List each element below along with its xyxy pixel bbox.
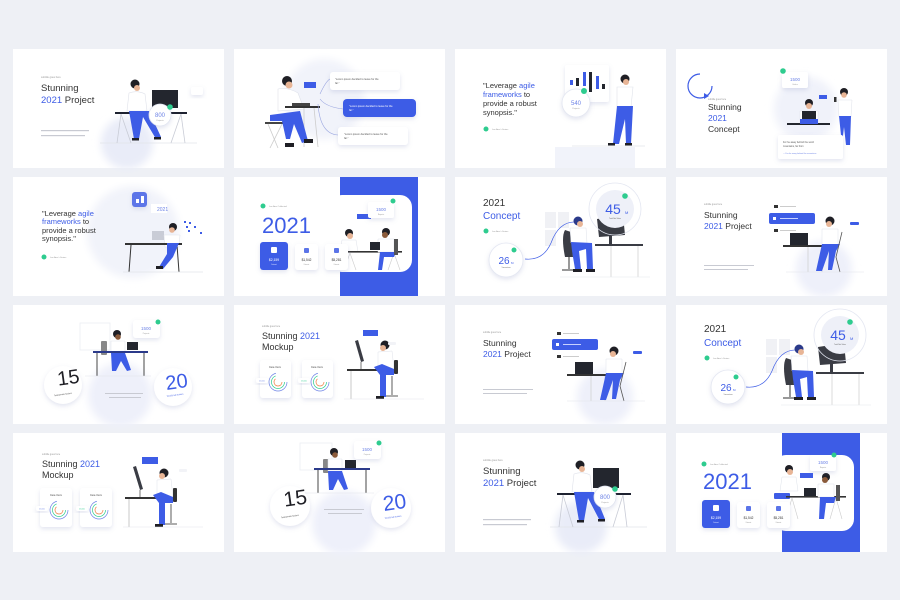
text block (483, 389, 533, 394)
quote text: "Leverage agile (42, 209, 94, 218)
title (483, 198, 520, 234)
play icon (688, 74, 712, 99)
illustration: woman at desk (85, 330, 151, 376)
illustration: standing woman (572, 74, 645, 146)
title: 2021 Project (483, 478, 537, 489)
title: 2021 (483, 198, 506, 209)
curve (525, 222, 576, 259)
card: 1500: 1500 (376, 207, 387, 212)
author (484, 126, 509, 132)
stat card 2: $1,542 (744, 516, 754, 520)
slide 16: 2021 stats with blue panel (676, 433, 887, 552)
title: Stunning (41, 83, 79, 94)
circle stat: 20 (371, 488, 411, 528)
badge: 800 (594, 486, 618, 508)
author: Lee Ann's Series (492, 128, 509, 131)
heading: 2021: Lee Ann Collected (269, 205, 288, 208)
title: 2021 Project (483, 349, 531, 359)
chart card 1: Data charts (269, 366, 282, 369)
slide 11: Stunning 2021 Project with chat (455, 305, 666, 425)
circle stat: 26M: M (733, 388, 736, 392)
quote text: synopsis." (42, 234, 76, 243)
title: Concept (483, 211, 520, 222)
quote text: frameworks to (483, 90, 530, 99)
circle stat: 45M: 45 (830, 327, 846, 343)
quote text: synopsis." (483, 108, 517, 117)
illustration card (774, 455, 854, 531)
card: 1500: Projects (364, 453, 370, 456)
slide 9: 15 and 20 stats (13, 305, 224, 427)
window (80, 323, 110, 350)
circle stat: 45M: Total Net Sales (609, 217, 621, 220)
title: Mockup (42, 470, 74, 480)
title: subtitle goes here (708, 98, 727, 101)
illustration card (330, 195, 412, 272)
circle stat: 45M: 45 (605, 201, 621, 217)
slide 3: quote with bar chart (455, 49, 666, 168)
title: subtitle goes here (262, 325, 281, 328)
circle stat: 20 (154, 368, 192, 406)
chart card 1: 45,000 (259, 380, 265, 382)
text block (41, 130, 89, 136)
illustration: person at desk (123, 223, 203, 272)
title: subtitle goes here (483, 459, 503, 462)
stat card 2: $1,542 (302, 258, 312, 262)
title (708, 98, 742, 134)
chart card 1 (256, 360, 291, 398)
title: subtitle goes here (704, 203, 723, 206)
connector lines (318, 79, 343, 135)
stat card 2 (737, 502, 760, 528)
icon: chart square (132, 192, 147, 207)
slide 7: 2021 Concept (455, 177, 666, 296)
circle stat: 15: 15 (282, 486, 308, 512)
title: Stunning (708, 102, 742, 112)
badge: 800: Projects (156, 119, 164, 122)
quote card 3: far." (344, 136, 349, 140)
text block (483, 519, 531, 525)
chart card 1 (36, 488, 72, 527)
slide 2: man with quote bubbles (234, 49, 445, 168)
title: Concept (708, 124, 740, 134)
window grid (545, 212, 569, 246)
chart card 2: 45,000 (301, 380, 307, 382)
circle stat: 15 (44, 366, 82, 404)
circle stat: 26M: 26 (498, 256, 510, 267)
stat card 2 (295, 244, 318, 270)
quote card 2 (blue): "Lorem ipsum decided to leave for the (349, 104, 393, 108)
chart card 2 (76, 488, 112, 527)
slide 6: 2021 stats with blue panel (234, 177, 445, 296)
title: Lee Ann's Series (713, 357, 730, 360)
title: Concept (704, 338, 741, 349)
title: subtitle goes here (42, 453, 61, 456)
title: 2021 Project (704, 221, 752, 231)
slide 15: Stunning 2021 Project (455, 433, 666, 553)
stat card 2: Dataset (304, 263, 310, 266)
circle stat: 26M: Transactions (723, 393, 733, 396)
title: 2021 (704, 324, 727, 335)
badge: 800 (149, 104, 173, 126)
title (483, 459, 537, 489)
chart card 2: Data charts (90, 494, 103, 497)
chat list (552, 332, 598, 358)
title: Stunning 2021 (262, 331, 320, 341)
chat list (769, 205, 815, 232)
label: 2021: 2021 (157, 207, 168, 213)
stat card 1 (blue): Dataset (271, 263, 277, 266)
badge: 800: 800 (155, 113, 166, 119)
title (41, 76, 95, 106)
bar chart card (565, 65, 609, 102)
author (42, 254, 67, 260)
quote text: provide a robust (42, 226, 97, 235)
chart card 1: Data charts (50, 494, 63, 497)
text block (704, 265, 754, 270)
quote card 2 (blue): far." (349, 108, 354, 112)
badge: 540 (562, 88, 590, 117)
illustration: man at monitor (123, 457, 203, 527)
stat card 3 (767, 502, 790, 528)
quote card 1 (330, 72, 400, 90)
title: Stunning 2021 (42, 459, 100, 469)
chart card 1: 45,000 (39, 508, 45, 510)
window grid (766, 339, 790, 373)
stat card 3: $5,281 (332, 258, 342, 262)
illustration: man on stool with laptop (265, 76, 320, 148)
illustration: woman at desk (304, 448, 374, 493)
card: 1500 (810, 452, 836, 471)
card: 1500 (354, 440, 382, 459)
chart card 2 (298, 360, 333, 398)
title: subtitle goes here (483, 331, 502, 334)
stat card 2: Dataset (746, 521, 752, 524)
title: Stunning (704, 210, 738, 220)
card: 1500 (368, 198, 396, 218)
title: Stunning (483, 466, 521, 477)
quote text: frameworks to (42, 217, 89, 226)
stat card 3: Dataset (334, 263, 340, 266)
heading: 2021: 2021 (703, 469, 752, 494)
title: Mockup (262, 342, 294, 352)
text block (105, 393, 143, 398)
badge: 800: Projects (601, 501, 609, 504)
curve (746, 350, 797, 387)
heading: 2021: 2021 (262, 213, 311, 238)
circle stat: 20: Total Email Notices (384, 515, 402, 520)
slide 1: Stunning 2021 Project (13, 49, 224, 169)
card: 1500: Reports (378, 213, 384, 216)
title (704, 324, 741, 360)
slide 5: quote with desk (13, 177, 224, 296)
circle stat: 26M: M (511, 261, 514, 265)
label: 2021 (151, 204, 168, 213)
badge: 800: 800 (600, 495, 611, 501)
illustration: man at laptop and standing woman (787, 88, 852, 145)
badge: 540: Projects (572, 107, 580, 110)
circle stat: 26M (489, 243, 523, 277)
stat card 3: $5,281 (774, 516, 784, 520)
slide 13: Stunning 2021 Mockup (13, 433, 224, 552)
text card: mountains, far from (783, 145, 804, 148)
blue panel (782, 433, 860, 552)
stat card 3: Dataset (776, 521, 782, 524)
quote text (483, 81, 538, 117)
circle stat: 20: 20 (164, 370, 189, 395)
circle stat: 26M: Transactions (501, 266, 511, 269)
card: 1500 (780, 68, 808, 88)
card: 1500: 1500 (790, 77, 801, 82)
blue panel (340, 177, 418, 296)
title: Lee Ann's Series (492, 230, 509, 233)
title (262, 325, 320, 352)
quote card 3 (338, 127, 408, 145)
quote card 1: far." (335, 81, 340, 85)
badge: 540: 540 (571, 101, 582, 107)
author: Lee Ann's Series (50, 256, 67, 259)
circle stat: 45M: M (625, 210, 628, 215)
chart card 2: Data charts (311, 366, 324, 369)
stat card 1 (blue): $2,159 (269, 258, 279, 262)
slide 12: 2021 Concept (676, 305, 887, 424)
circle stat: 26M: 26 (720, 383, 732, 394)
quote text (42, 209, 97, 243)
window (300, 443, 332, 470)
text card (778, 135, 843, 159)
circle stat: 45M (589, 183, 641, 235)
card: 1500: 1500 (141, 326, 152, 331)
title (42, 453, 100, 480)
stat card 1 (blue) (702, 500, 730, 528)
circle stat: 45M: Total Net Sales (834, 343, 846, 346)
stat card 1 (blue): Dataset (713, 521, 719, 524)
illustration: man at monitor (344, 330, 424, 399)
illustration: girl at desk (100, 80, 197, 143)
illustration: girl at desk (550, 460, 647, 527)
circle stat: 15: Total Emails Notices (281, 514, 299, 519)
slide 8: Stunning 2021 Project with chat (676, 177, 887, 297)
illustration: woman at laptop (783, 216, 864, 272)
stat card 3 (325, 244, 348, 270)
slide 14: 15 and 20 stats (234, 433, 445, 555)
chart card 2: 45,000 (79, 508, 85, 510)
circle stat: 15: Total Emails Notices (54, 392, 72, 397)
quote card 1: "Lorem ipsum decided to leave for the (335, 77, 379, 81)
circle stat: 26M (711, 370, 745, 404)
text block (324, 509, 364, 514)
title: Stunning (483, 338, 517, 348)
text card: For he away behind the word (783, 141, 815, 144)
text card: — Far far away behind the mountains (783, 152, 816, 155)
card: 1500: Orders (792, 84, 798, 86)
quote text: provide a robust (483, 99, 538, 108)
illustration: woman at laptop (567, 346, 645, 401)
circle stat: 15: 15 (56, 366, 81, 391)
dots (184, 221, 202, 234)
title (483, 331, 531, 359)
quote card 3: "Lorem ipsum decided to leave for the (344, 132, 388, 136)
title: 2021 (708, 113, 727, 123)
circle stat: 20: 20 (381, 490, 408, 516)
title (704, 203, 752, 231)
card: 1500: 1500 (818, 460, 829, 465)
circle stat: 45M: M (850, 336, 853, 341)
slide 4: Stunning 2021 Concept (676, 49, 887, 168)
quote card 2 (blue) (343, 99, 416, 117)
title: subtitle goes here (41, 76, 61, 79)
card: 1500: Projects (143, 332, 149, 335)
heading: 2021: Lee Ann Collected (710, 463, 729, 466)
circle stat: 15 (270, 486, 310, 526)
slide 10: Stunning 2021 Mockup (234, 305, 445, 424)
card: 1500 (133, 320, 160, 338)
small card (191, 87, 203, 95)
card: 1500: Reports (820, 466, 826, 469)
title: 2021 Project (41, 95, 95, 106)
illustration: man at monitor (560, 215, 650, 277)
quote text: "Leverage agile (483, 81, 535, 90)
stat card 1 (blue): $2,159 (711, 516, 721, 520)
stat card 1 (blue) (260, 242, 288, 270)
illustration: man at monitor (781, 343, 871, 405)
card: 1500: 1500 (362, 447, 373, 452)
circle stat: 45M (814, 309, 866, 361)
circle stat: 20: Total Email Notices (166, 393, 184, 398)
